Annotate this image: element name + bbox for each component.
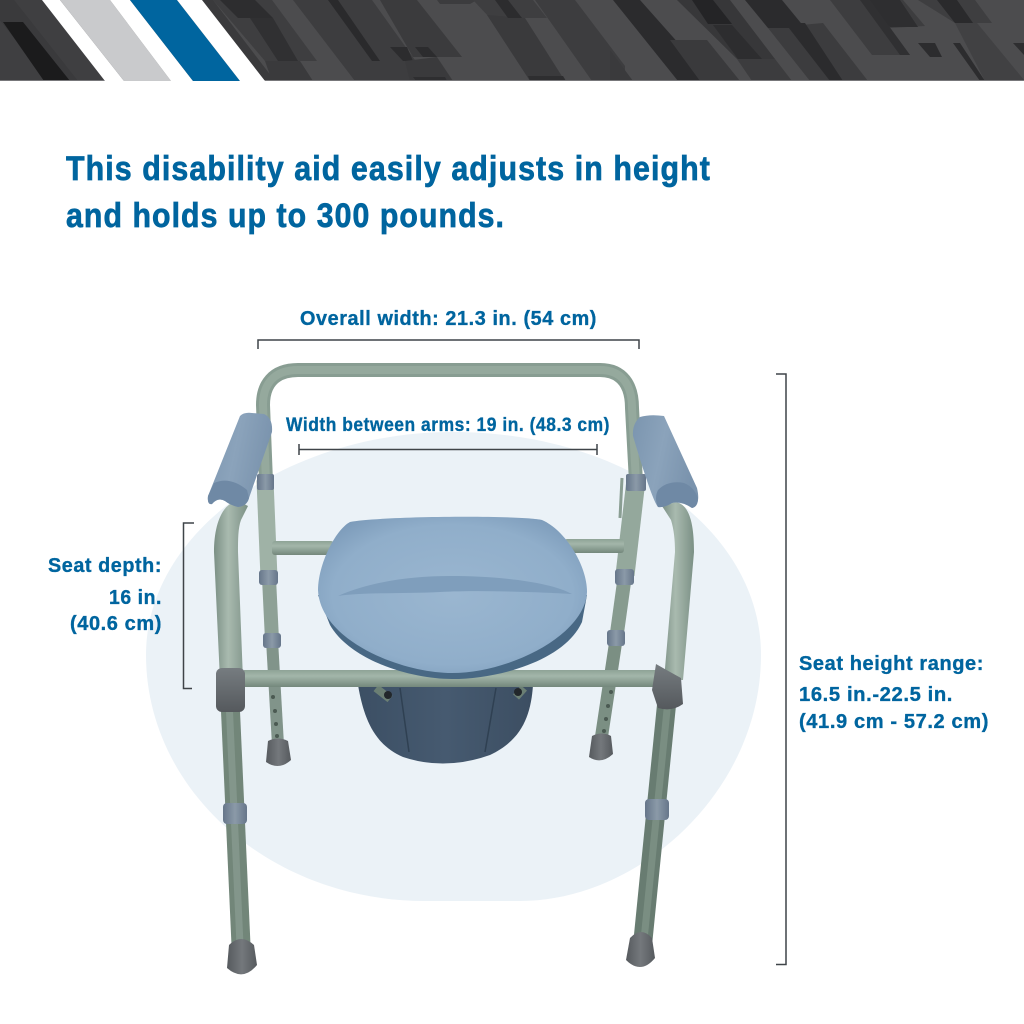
dimension: overall width: [258, 307, 639, 349]
back frame: [263, 370, 636, 518]
title: and holds up to 300 pounds.: [66, 197, 505, 235]
header banner: [0, 0, 1024, 81]
front crossbar: [244, 670, 656, 687]
right armrest: [633, 415, 698, 508]
dimension: seat height range: (41.9 cm - 57.2 cm): [799, 710, 989, 733]
front sleeves: [223, 799, 669, 824]
dimension: overall width: Overall width: 21.3 in. (54 cm): [300, 307, 597, 330]
background blob: [146, 432, 761, 901]
dimension: seat depth: [48, 523, 194, 688]
back legs: [265, 480, 636, 745]
dimension: seat depth: (40.6 cm): [70, 612, 162, 635]
back sleeves: [257, 474, 646, 648]
back height holes: [271, 670, 615, 738]
dimension: seat depth: Seat depth:: [48, 554, 162, 577]
dimension: seat height range: [776, 374, 989, 964]
leg brackets: [216, 664, 683, 712]
dimension: width between arms: [286, 414, 610, 455]
upper crossbar: [272, 539, 624, 555]
dimension: width between arms: Width between arms: 19 in. (48.3 cm): [286, 414, 610, 436]
left armrest: [208, 413, 272, 507]
seat lid: [318, 517, 587, 679]
bucket: [358, 685, 533, 764]
title: This disability aid easily adjusts in height: [66, 150, 711, 188]
title: [66, 150, 711, 235]
dimension: seat depth: 16 in.: [109, 586, 162, 609]
dimension: seat height range: 16.5 in.-22.5 in.: [799, 683, 953, 706]
dimension: seat height range: Seat height range:: [799, 652, 984, 675]
front right leg: [643, 502, 694, 940]
back feet: [266, 734, 613, 766]
chair photo: [208, 370, 698, 974]
front left leg: [214, 501, 248, 945]
front feet: [227, 932, 655, 974]
